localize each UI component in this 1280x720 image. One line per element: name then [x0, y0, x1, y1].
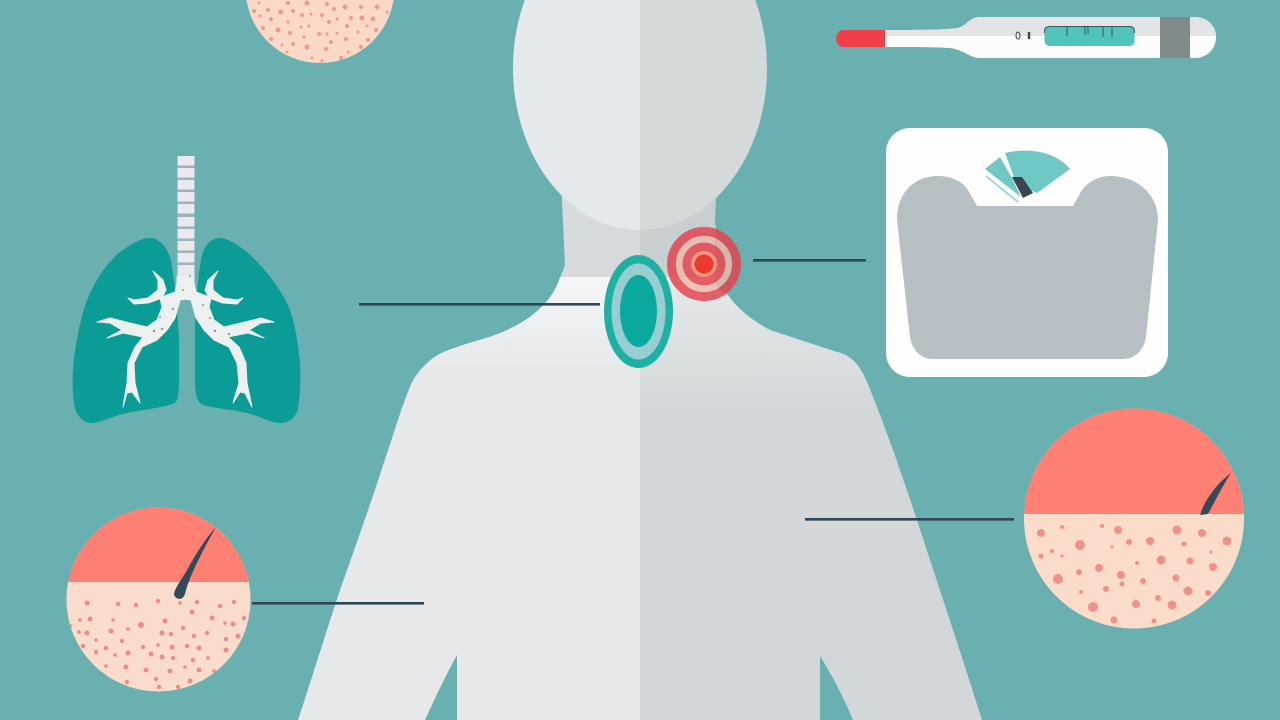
thermometer body shade: [885, 17, 1216, 36]
bronchi: [97, 271, 274, 407]
bronchi specks: [153, 275, 230, 335]
scale base: [886, 128, 1168, 377]
left circle rash dots: [68, 599, 246, 689]
scale dial lower stripe: [986, 176, 1018, 202]
left circle upper coral: [68, 508, 249, 582]
left lung: [73, 238, 179, 423]
right circle hair: [1200, 473, 1231, 515]
red tip: [836, 30, 885, 47]
grey band: [1160, 17, 1190, 58]
neck: [560, 180, 717, 300]
thyroid: teal oval: [604, 255, 673, 368]
connector line: neck pain: [753, 259, 866, 262]
skin circle: top, cropped: [246, 0, 394, 63]
display ticks: [1067, 27, 1112, 37]
torso left half: [298, 277, 640, 720]
top circle rash dots: [252, 0, 388, 62]
display: [1044, 26, 1134, 46]
thermometer body lower: [885, 17, 1216, 58]
right circle upper coral: [1020, 405, 1250, 514]
neck shadow right: [640, 225, 716, 277]
icon: weighing scale: [886, 128, 1168, 377]
icon: lungs: [73, 156, 300, 423]
head left half: [513, 0, 640, 230]
skin circle: left: [66, 508, 250, 692]
pain target: red concentric circles: [672, 232, 736, 296]
connector line: thyroid: [359, 303, 600, 306]
head right half: [640, 0, 767, 230]
skin circle: right: [1020, 405, 1250, 628]
thermometer small marks: [1016, 32, 1029, 39]
left circle hair: [174, 527, 216, 599]
human figure silhouette: [298, 0, 982, 720]
display top edge: [1044, 26, 1134, 33]
scale dial left: [985, 157, 1021, 197]
connector line: right skin: [805, 518, 1014, 521]
scale platform: [897, 176, 1158, 359]
right circle rash dots: [1037, 524, 1232, 624]
icon: thermometer: [836, 17, 1216, 58]
right lung: [195, 238, 300, 423]
torso right half: [640, 277, 982, 720]
trachea: [178, 156, 194, 277]
scale dial right: [1005, 151, 1070, 193]
connector line: left skin: [252, 602, 424, 605]
scale needle: [1012, 177, 1033, 198]
